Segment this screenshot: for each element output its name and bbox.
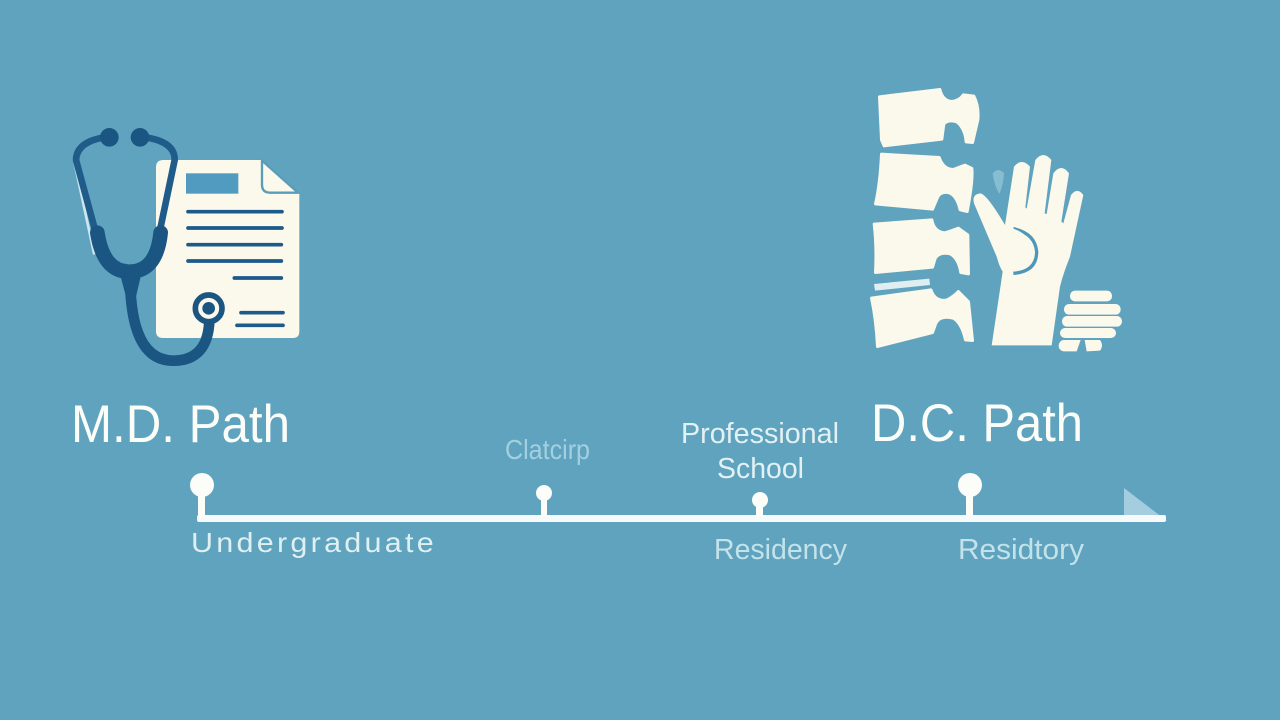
icon: stethoscope bbox=[74, 128, 222, 361]
milestone: undergraduate bbox=[190, 473, 214, 518]
timeline bbox=[190, 473, 1167, 522]
milestone: residency bbox=[958, 473, 982, 518]
timeline arrow head bbox=[1124, 488, 1167, 521]
icon: open hand bbox=[974, 155, 1083, 345]
milestone: clinical bbox=[536, 485, 552, 517]
icon: intervertebral disc bbox=[874, 279, 930, 291]
icon: spine and hand bbox=[871, 89, 1122, 351]
label: Residency: Residency bbox=[714, 534, 847, 566]
heading: M.D. Path: M.D. Path bbox=[71, 395, 290, 454]
label: Professional School: School bbox=[717, 453, 804, 485]
label: Professional School: Professional bbox=[681, 418, 839, 450]
milestone: professional school bbox=[752, 492, 768, 517]
icon: document page bbox=[156, 160, 299, 338]
label: Professional School bbox=[681, 418, 839, 485]
label: Undergraduate: Undergraduate bbox=[191, 527, 437, 558]
heading: D.C. Path: D.C. Path bbox=[871, 394, 1083, 453]
label: Clatcirp: Clatcirp bbox=[505, 434, 590, 465]
icon: spine vertebrae bbox=[871, 89, 978, 347]
icon: water drop bbox=[993, 170, 1004, 194]
icon: stethoscope and medical document bbox=[74, 128, 299, 361]
timeline axis line bbox=[197, 515, 1166, 522]
label: Residtory: Residtory bbox=[958, 534, 1084, 566]
icon: folded fingers bbox=[1059, 291, 1122, 351]
